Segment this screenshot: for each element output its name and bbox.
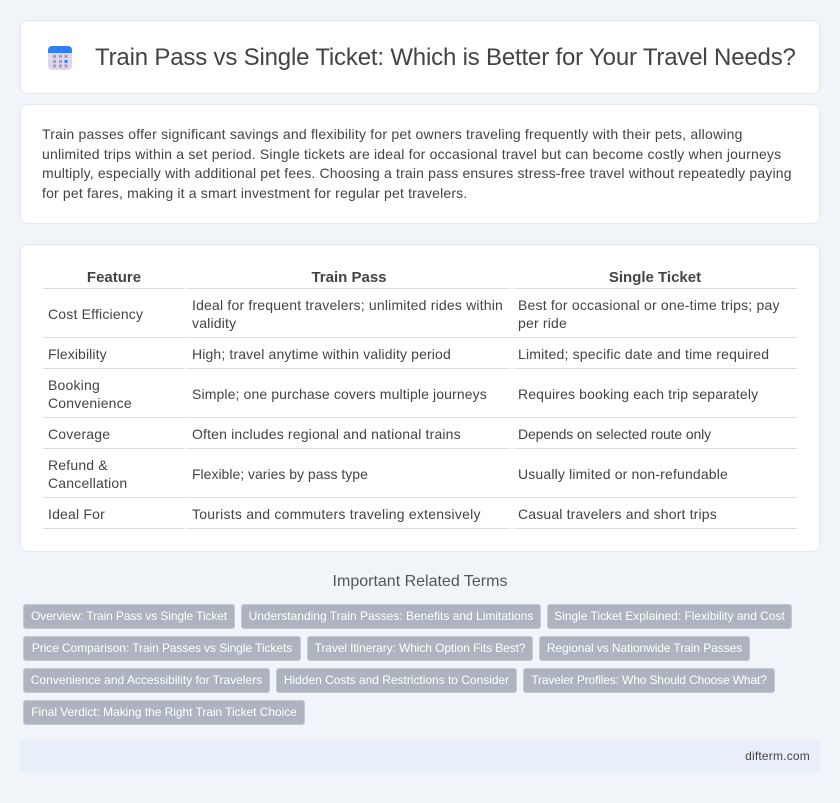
related terms tags: Hidden Costs and Restrictions to Consider — [284, 673, 509, 687]
row: coverage — [48, 426, 712, 442]
related terms heading: Important Related Terms — [333, 573, 507, 590]
row: ideal for — [48, 506, 717, 522]
comparison table — [43, 269, 797, 529]
row: booking convenience: Requires booking each trip separately — [518, 386, 758, 402]
row: ideal for: Ideal For — [48, 506, 105, 522]
row: booking convenience: Booking — [48, 377, 100, 393]
row: booking convenience: Simple; one purchase covers multiple journeys — [192, 386, 487, 402]
related terms tags — [23, 604, 792, 725]
row: flexibility — [48, 346, 769, 362]
summary text: unlimited trips within a set period. Single tickets are ideal for occasional travel but can become costly when journeys — [42, 146, 781, 162]
row: cost efficiency — [48, 297, 780, 331]
row: coverage: Coverage — [48, 426, 110, 442]
column headers: Single Ticket — [609, 269, 701, 286]
row: refund and cancellation: Usually limited or non-refundable — [518, 466, 728, 482]
column headers: Feature — [87, 269, 141, 286]
related terms tags: Travel Itinerary: Which Option Fits Best? — [315, 641, 525, 655]
row: cost efficiency: validity — [192, 315, 236, 331]
row: flexibility: High; travel anytime within validity period — [192, 346, 451, 362]
row: flexibility: Flexibility — [48, 346, 107, 362]
footer brand: difterm.com — [745, 749, 810, 763]
column headers: Train Pass — [311, 269, 387, 286]
row: flexibility: Limited; specific date and time required — [518, 346, 769, 362]
row: refund and cancellation: Refund & — [48, 457, 108, 473]
row: cost efficiency: Cost Efficiency — [48, 306, 143, 322]
related terms tags: Traveler Profiles: Who Should Choose What? — [531, 673, 767, 687]
related terms tags: Single Ticket Explained: Flexibility and Cost — [554, 609, 785, 623]
row: booking convenience: Convenience — [48, 395, 132, 411]
row: cost efficiency: Ideal for frequent travelers; unlimited rides within — [192, 297, 503, 313]
title: Train Pass vs Single Ticket: Which is Better for Your Travel Needs? — [95, 44, 796, 71]
row: ideal for: Casual travelers and short trips — [518, 506, 717, 522]
related terms tags: Overview: Train Pass vs Single Ticket — [31, 609, 227, 623]
related terms tags: Understanding Train Passes: Benefits and Limitations — [249, 609, 533, 623]
summary text: Train passes offer significant savings and flexibility for pet owners traveling frequently with their pets, allowing — [42, 126, 743, 142]
related terms tags: Regional vs Nationwide Train Passes — [547, 641, 742, 655]
row: booking convenience — [48, 377, 758, 411]
row: refund and cancellation: Cancellation — [48, 475, 127, 491]
summary text: multiply, especially with additional pet fees. Choosing a train pass ensures stress-free travel without repeatedly paying — [42, 165, 792, 181]
row: refund and cancellation: Flexible; varies by pass type — [192, 466, 368, 482]
summary text: for pet fares, making it a smart investment for regular pet travelers. — [42, 185, 467, 201]
row: refund and cancellation — [48, 457, 728, 491]
row: coverage: Depends on selected route only — [518, 426, 711, 442]
summary card — [20, 104, 820, 224]
summary text — [42, 126, 792, 201]
row: coverage: Often includes regional and national trains — [192, 426, 461, 442]
footer bar — [20, 739, 820, 773]
icon: calendar — [48, 46, 72, 70]
column headers — [87, 269, 701, 286]
row: cost efficiency: per ride — [518, 315, 567, 331]
row: ideal for: Tourists and commuters traveling extensively — [192, 506, 481, 522]
related terms tags: Price Comparison: Train Passes vs Single Tickets — [32, 641, 292, 655]
header card — [20, 20, 820, 94]
related terms tags: Convenience and Accessibility for Travelers — [31, 673, 262, 687]
comparison table card — [20, 244, 820, 552]
row: cost efficiency: Best for occasional or one-time trips; pay — [518, 297, 780, 313]
related terms tags: Final Verdict: Making the Right Train Ticket Choice — [31, 705, 297, 719]
